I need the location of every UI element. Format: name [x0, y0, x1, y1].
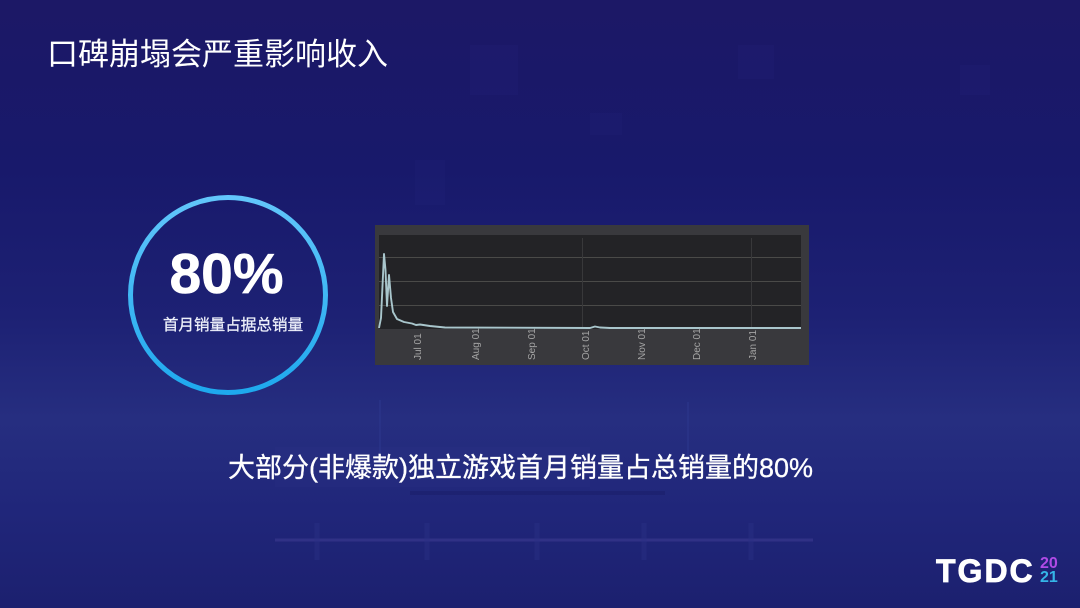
line chart: sales over time: [375, 225, 809, 365]
logo year 21: 21: [1040, 569, 1058, 586]
x axis labels: Oct 01: [581, 330, 592, 360]
x axis labels: [413, 328, 759, 360]
ring: [128, 195, 328, 395]
x axis labels: Jul 01: [413, 333, 424, 360]
logo year 20: 20: [1040, 555, 1058, 572]
footer statement: 大部分(非爆款)独立游戏首月销量占总销量的80%: [228, 453, 813, 483]
logo: TGDC 2021: [936, 553, 1058, 589]
x axis labels: Aug 01: [471, 328, 482, 360]
x axis labels: Sep 01: [527, 328, 538, 360]
stat circle: 80%: [128, 195, 328, 395]
plot area: [379, 235, 801, 329]
x axis labels: Nov 01: [637, 328, 648, 360]
sales line: [379, 254, 801, 328]
chart frame: [375, 225, 809, 365]
stat value: 80%: [169, 242, 284, 306]
stat caption: 首月销量占据总销量: [163, 317, 303, 334]
x axis labels: Jan 01: [748, 330, 759, 360]
x axis labels: Dec 01: [692, 328, 703, 360]
title: 口碑崩塌会严重影响收入: [47, 37, 388, 72]
logo wordmark: TGDC: [936, 553, 1035, 589]
